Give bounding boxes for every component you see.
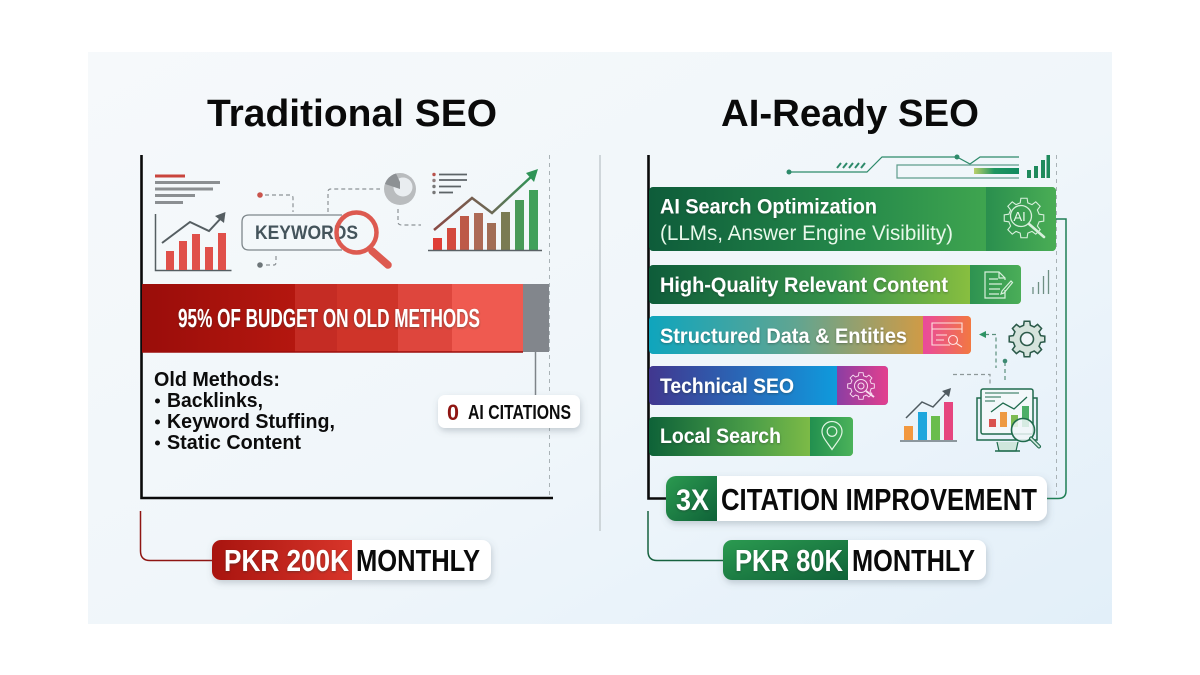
bar: technical SEO [649, 366, 889, 405]
icon: settings gear [1009, 321, 1045, 357]
icon: browser search [932, 323, 962, 347]
cost badge: PKR 80K monthly [723, 540, 986, 580]
callout: 0 AI citations: AI CITATIONS [468, 402, 571, 424]
bar: local search [649, 417, 854, 456]
bar: AI search optimization: AI Search Optimization [660, 196, 877, 218]
text block: old methods [154, 369, 335, 454]
dashed arrow to structured data [979, 331, 996, 368]
leader line to AI citations [534, 352, 536, 396]
cost badge: PKR 200K monthly [212, 540, 491, 580]
cost badge: PKR 80K monthly: MONTHLY [852, 543, 975, 578]
icon: monitor analytics [977, 389, 1039, 451]
background panel [88, 52, 1112, 624]
bar: technical SEO: Technical SEO [660, 375, 794, 398]
heading: AI-Ready SEO: AI-Ready SEO [721, 93, 979, 135]
icon: text lines [155, 174, 220, 204]
connector to cost badge [140, 511, 213, 560]
dashed connectors [265, 189, 421, 265]
connector to cost badge [648, 511, 724, 560]
text block: old methods: Backlinks, [167, 390, 263, 412]
icon: thin signal bars [1033, 270, 1048, 294]
bar: high-quality relevant content: High-Quality Relevant Content [660, 274, 948, 297]
callout: 3X citation improvement: CITATION IMPROVEMENT [721, 482, 1037, 517]
icon: map pin [822, 422, 842, 450]
icon: AI gear: AI [1014, 209, 1026, 224]
icon: list [432, 173, 467, 194]
icon: magnifier [336, 212, 388, 265]
cost badge: PKR 80K monthly: PKR 80K [735, 543, 844, 578]
callout: 3X citation improvement: 3X [676, 484, 709, 517]
icon: AI gear [1004, 198, 1044, 238]
panel: AI-Ready SEO [648, 154, 1066, 580]
callout: 0 AI citations [438, 395, 580, 428]
text block: old methods: Keyword Stuffing, [167, 411, 335, 433]
bar: local search: Local Search [660, 425, 781, 448]
icon: signal bars green [1027, 155, 1050, 178]
connector dot red [257, 192, 263, 198]
callout: 0 AI citations: 0 [447, 400, 459, 425]
bar: high-quality relevant content [649, 265, 1022, 304]
chart frame [648, 155, 1056, 498]
bar: structured data and entities [649, 316, 972, 354]
icon: colourful bar chart [900, 388, 957, 441]
icon: small bar chart [156, 212, 232, 270]
callout: 3X citation improvement [666, 476, 1047, 521]
panel: Traditional SEO [140, 155, 580, 580]
chart frame [142, 155, 553, 498]
bar: AI search optimization: (LLMs, Answer Engine Visibility) [660, 222, 953, 245]
connector dot grey [257, 262, 263, 268]
icon: document [985, 272, 1012, 298]
dashed connectors to monitor [953, 359, 1007, 386]
cost badge: PKR 200K monthly: PKR 200K [224, 543, 350, 578]
text block: old methods: Old Methods: [154, 369, 280, 391]
icon: pie chart [384, 173, 416, 205]
heading: Traditional SEO: Traditional SEO [207, 93, 497, 135]
keywords search box [242, 215, 358, 250]
budget bar: 95 percent on old methods [142, 284, 549, 352]
text block: old methods: Static Content [167, 432, 301, 454]
decorative circuit [786, 154, 1019, 178]
bar: AI search optimization [649, 187, 1058, 251]
connector: optimisation to citation improvement [1046, 219, 1066, 498]
keywords search box: KEYWORDS [255, 223, 358, 244]
icon: technical gear [848, 373, 874, 399]
centre divider [599, 155, 601, 531]
bar: structured data and entities: Structured Data & Entities [660, 325, 907, 348]
cost badge: PKR 200K monthly: MONTHLY [356, 543, 480, 578]
icon: growth bar chart [428, 169, 542, 250]
budget bar label: 95% OF BUDGET ON OLD METHODS [178, 305, 480, 333]
